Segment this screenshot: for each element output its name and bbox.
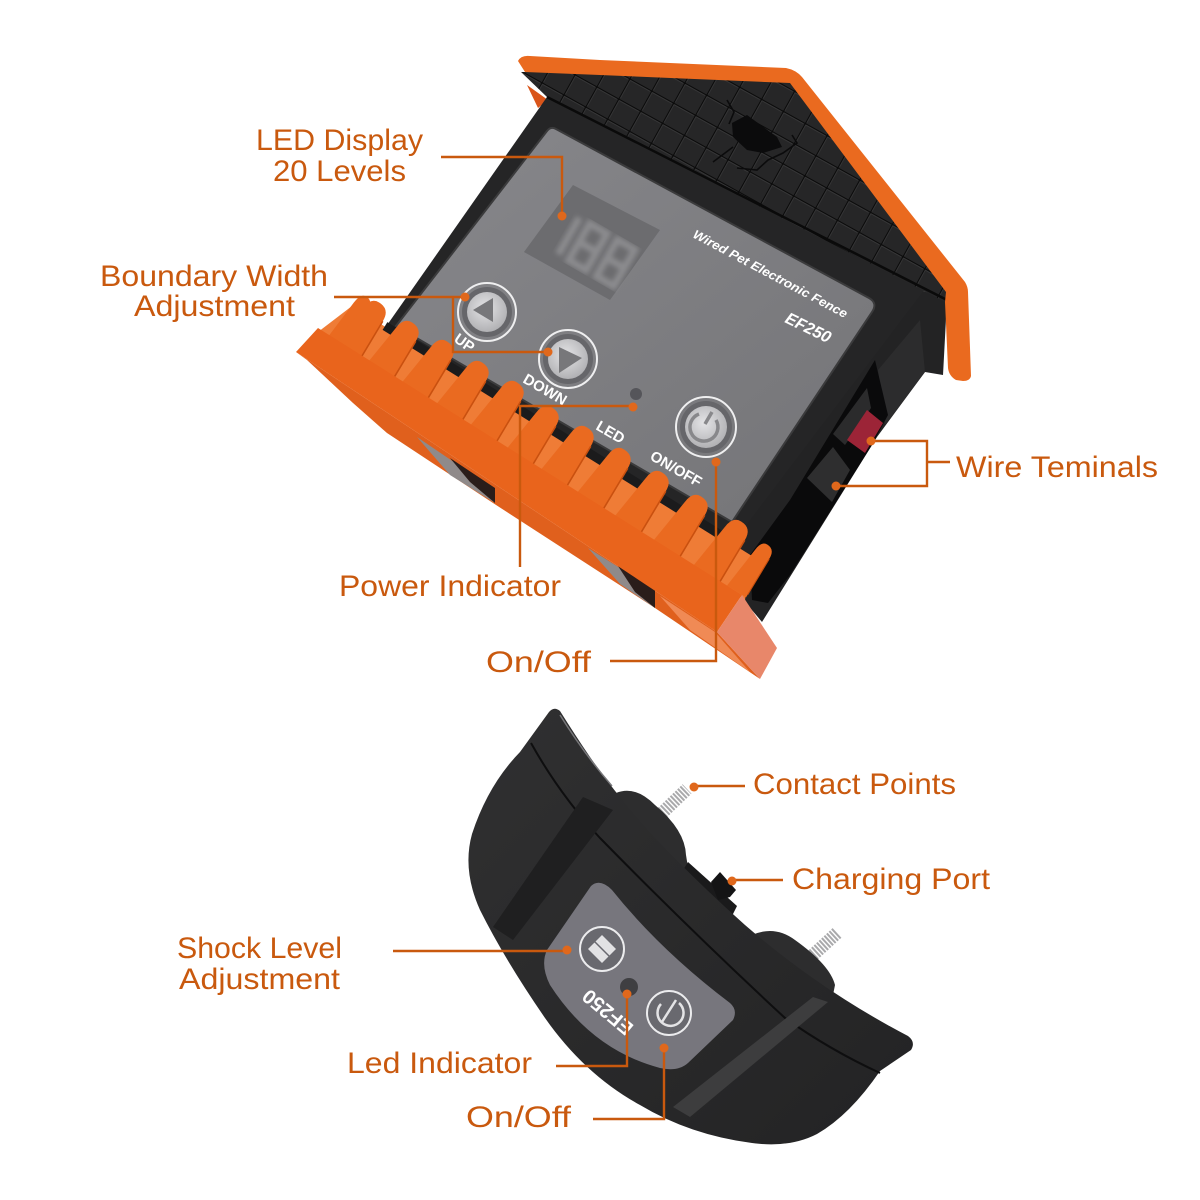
callout: wire terminals: Wire Teminals xyxy=(956,451,1158,484)
charging port xyxy=(680,862,737,918)
rubber contact bump top xyxy=(616,791,690,880)
callout: on/off collar: On/Off xyxy=(466,1101,572,1134)
callout: led indicator xyxy=(347,990,632,1080)
callout: charging port: Charging Port xyxy=(792,863,991,896)
callout: contact points: Contact Points xyxy=(753,768,956,801)
callout: power indicator xyxy=(339,402,638,603)
callout: power indicator: Power Indicator xyxy=(339,570,561,603)
rubber contact bump bottom xyxy=(752,931,835,1000)
button: up xyxy=(458,283,516,341)
fence base rail xyxy=(296,328,742,632)
callout: wire terminals xyxy=(832,436,1158,490)
power LED hole xyxy=(630,388,642,400)
callout: on/off unit xyxy=(486,458,720,679)
collar ridge line xyxy=(531,743,880,1073)
transmitter front body xyxy=(385,97,925,540)
panel: fence transmitter unit xyxy=(296,56,971,679)
callout: shock level: Shock Level xyxy=(177,932,342,965)
fence pickets xyxy=(319,290,776,597)
rail end face xyxy=(717,595,777,679)
callout: boundary width: Boundary Width xyxy=(100,260,328,293)
dog silhouette on roof xyxy=(713,100,797,170)
callout: on/off collar xyxy=(466,1044,668,1134)
transmitter side wall xyxy=(735,287,947,622)
terminal recess xyxy=(750,360,888,603)
collar model text: EF250 xyxy=(578,984,638,1039)
panel label: led: LED xyxy=(593,418,628,448)
collar textured band xyxy=(673,997,828,1117)
contact screw top xyxy=(662,789,687,813)
panel label: on/off: ON/OFF xyxy=(647,448,705,491)
callout: shock level xyxy=(177,932,572,996)
callout: boundary width: Adjustment xyxy=(134,290,296,323)
collar control panel xyxy=(544,883,735,1069)
collar smooth band xyxy=(493,797,613,940)
callout: shock level: Adjustment xyxy=(179,963,341,996)
orange roof trim behind xyxy=(527,85,548,108)
wire terminal block xyxy=(807,388,883,502)
contact screw bottom xyxy=(813,932,838,955)
panel label: up: UP xyxy=(451,330,478,356)
LED display window xyxy=(524,185,660,300)
roof tiles xyxy=(521,72,960,302)
callout: boundary width xyxy=(100,260,552,356)
gray control panel xyxy=(396,128,874,522)
button: on/off xyxy=(676,397,736,457)
callout: LED display: 20 Levels xyxy=(273,155,406,188)
dark slot under fence pickets xyxy=(385,326,735,544)
collar button: adjust xyxy=(580,927,624,971)
orange band behind pickets xyxy=(318,306,752,600)
side wall upper plate xyxy=(878,320,925,425)
callout: led indicator: Led Indicator xyxy=(347,1047,532,1080)
panel label: down: DOWN xyxy=(520,371,570,409)
callout: LED display xyxy=(256,124,566,220)
panel: collar receiver xyxy=(468,709,913,1144)
brand text: Wired Pet Electronic Fence xyxy=(691,227,850,321)
collar body xyxy=(468,709,913,1144)
callout: on/off unit: On/Off xyxy=(486,646,592,679)
collar LED hole xyxy=(620,978,638,996)
collar highlight edge xyxy=(560,715,612,786)
collar button: power xyxy=(647,991,691,1035)
model text: EF250 xyxy=(782,309,835,347)
roof line xyxy=(547,97,947,300)
callout: LED display: LED Display xyxy=(256,124,423,157)
orange fence underside xyxy=(296,352,760,679)
orange roof edge xyxy=(518,56,971,381)
button: down xyxy=(539,330,597,388)
